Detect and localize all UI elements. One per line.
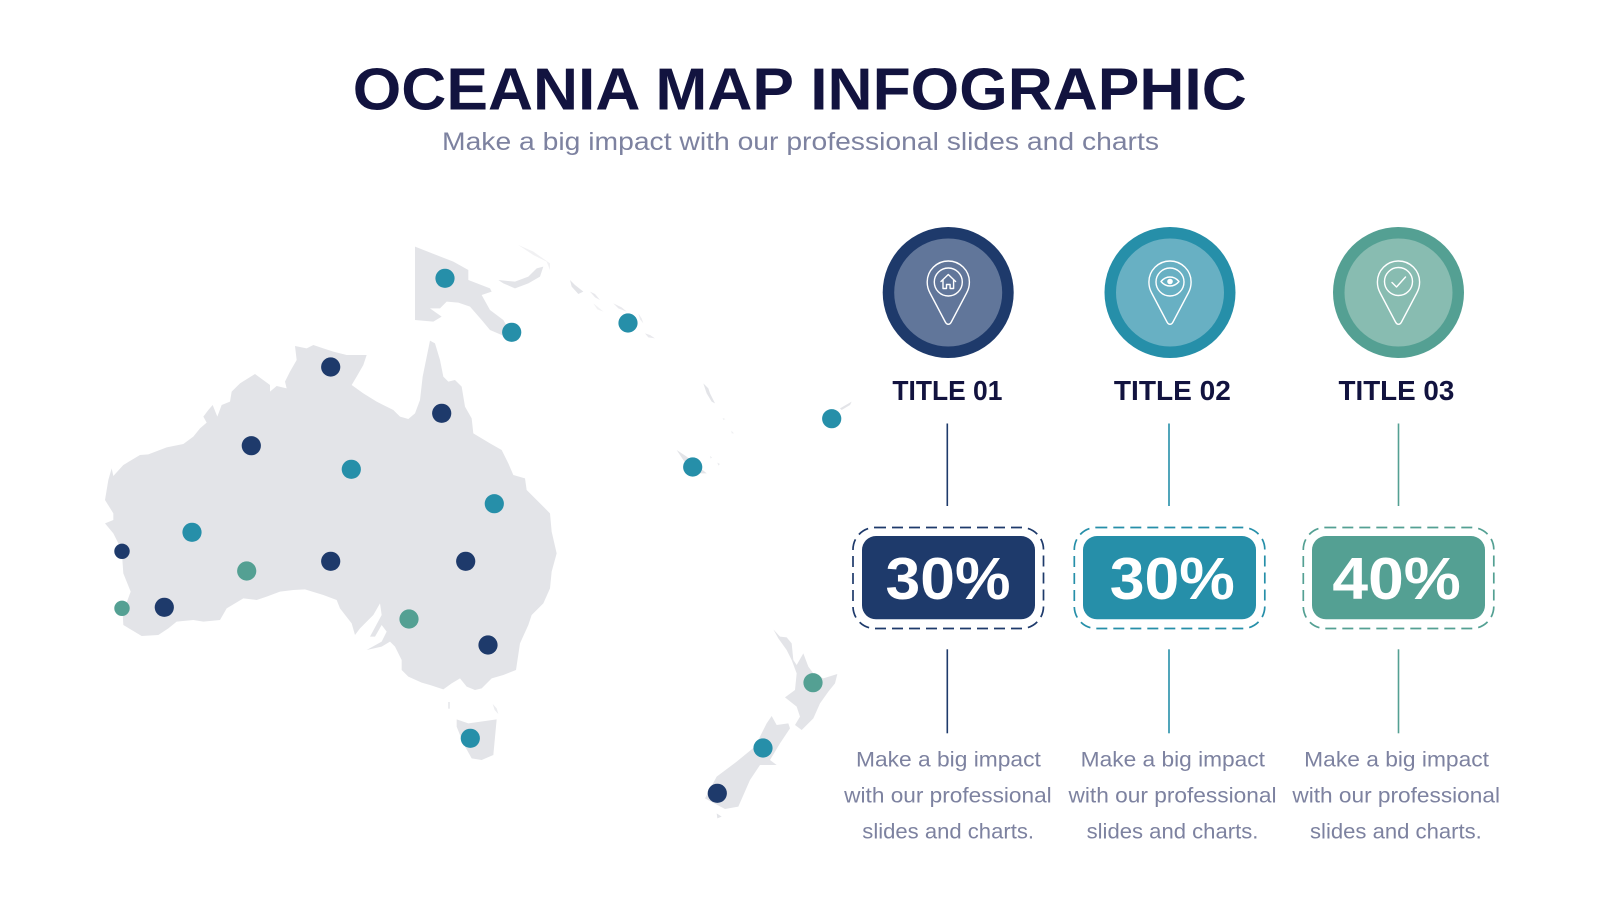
map markers — [114, 269, 841, 803]
text block: slides and charts. — [1310, 820, 1482, 843]
heading: title 01: TITLE 01 — [892, 375, 1002, 406]
badge: 30% — [853, 528, 1044, 628]
badge: 30%: 30% — [886, 546, 1010, 612]
map: Tasmania — [448, 702, 498, 760]
connector: lower — [1168, 649, 1170, 733]
title: OCEANIA MAP INFOGRAPHIC — [353, 55, 1247, 122]
connector: upper — [1398, 424, 1399, 506]
panel: column 01 — [843, 227, 1052, 843]
text block: Make a big impact — [1304, 749, 1489, 772]
badge: 40%: 40% — [1332, 546, 1461, 612]
heading: title 02: TITLE 02 — [1114, 375, 1231, 406]
connector: upper — [1168, 424, 1170, 506]
heading: title 03: TITLE 03 — [1338, 375, 1454, 406]
text block: Make a big impact — [1081, 749, 1265, 772]
icon: eye pin — [1104, 227, 1236, 358]
map: Papua New Guinea — [415, 247, 513, 340]
text block: with our professional — [843, 784, 1052, 807]
icon: house pin — [883, 227, 1014, 358]
text block: slides and charts. — [862, 820, 1034, 843]
text block — [1291, 749, 1500, 843]
connector: upper — [946, 424, 948, 506]
connector: lower — [1398, 649, 1399, 733]
text block — [1067, 749, 1276, 843]
badge: 40% — [1303, 528, 1494, 628]
map: New Zealand — [705, 629, 837, 818]
text block: with our professional — [1067, 784, 1276, 807]
subtitle: Make a big impact with our professional slides and charts — [442, 128, 1159, 156]
map: Pacific islands — [498, 245, 852, 473]
panel: column 03 — [1291, 227, 1500, 843]
badge: 30% — [1074, 528, 1265, 628]
icon: check pin — [1333, 227, 1464, 358]
text block: with our professional — [1291, 784, 1500, 807]
map: Australia — [105, 341, 557, 690]
map: Oceania — [105, 245, 852, 818]
connector: lower — [946, 649, 948, 733]
text block: slides and charts. — [1087, 820, 1258, 843]
badge: 30%: 30% — [1110, 546, 1235, 612]
text block — [843, 749, 1052, 843]
text block: Make a big impact — [856, 749, 1041, 772]
panel: column 02 — [1067, 227, 1276, 843]
